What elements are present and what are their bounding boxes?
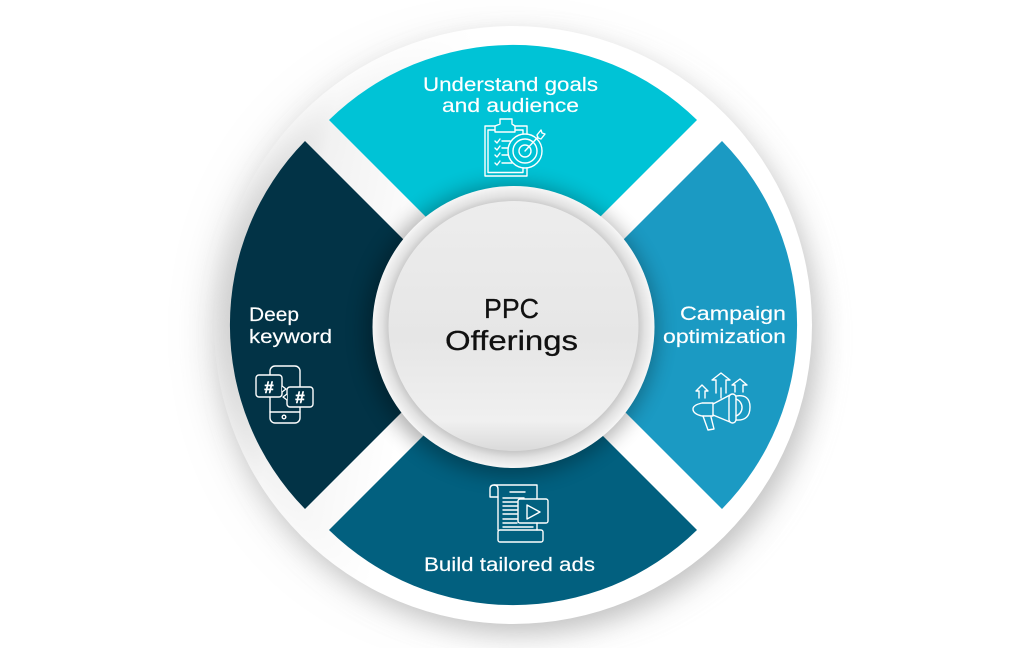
center title: PPC xyxy=(484,293,539,324)
text: campaign optimization: Campaign xyxy=(680,304,786,325)
text: understand goals and audience: and audience xyxy=(442,96,579,117)
text: campaign optimization xyxy=(663,304,786,348)
text: deep keyword: Deep xyxy=(249,305,299,326)
icon: clipboard with target xyxy=(485,119,545,176)
panel: understand goals and audience xyxy=(329,45,697,304)
text: campaign optimization: optimization xyxy=(663,327,786,348)
text: build tailored ads: Build tailored ads xyxy=(424,555,595,576)
icon: megaphone with arrows xyxy=(693,373,750,430)
text: deep keyword xyxy=(249,305,332,348)
panel: build tailored ads xyxy=(329,346,697,605)
text: deep keyword: keyword xyxy=(249,327,332,348)
center title xyxy=(445,293,578,356)
drop shadow: outer disc xyxy=(230,46,817,630)
icon: phone with hashtags: # xyxy=(295,388,305,407)
panel: campaign optimization xyxy=(538,141,797,509)
white outer disc xyxy=(214,26,812,624)
panel: deep keyword xyxy=(230,141,489,509)
text: understand goals and audience xyxy=(423,75,598,117)
center title: Offerings xyxy=(445,325,578,356)
icon: document with video xyxy=(490,485,548,542)
text: understand goals and audience: Understand goals xyxy=(423,75,598,96)
center disc shadow xyxy=(365,184,657,476)
icon: phone with hashtags xyxy=(256,366,313,423)
icon: phone with hashtags: # xyxy=(264,378,274,397)
center disc xyxy=(372,186,654,468)
